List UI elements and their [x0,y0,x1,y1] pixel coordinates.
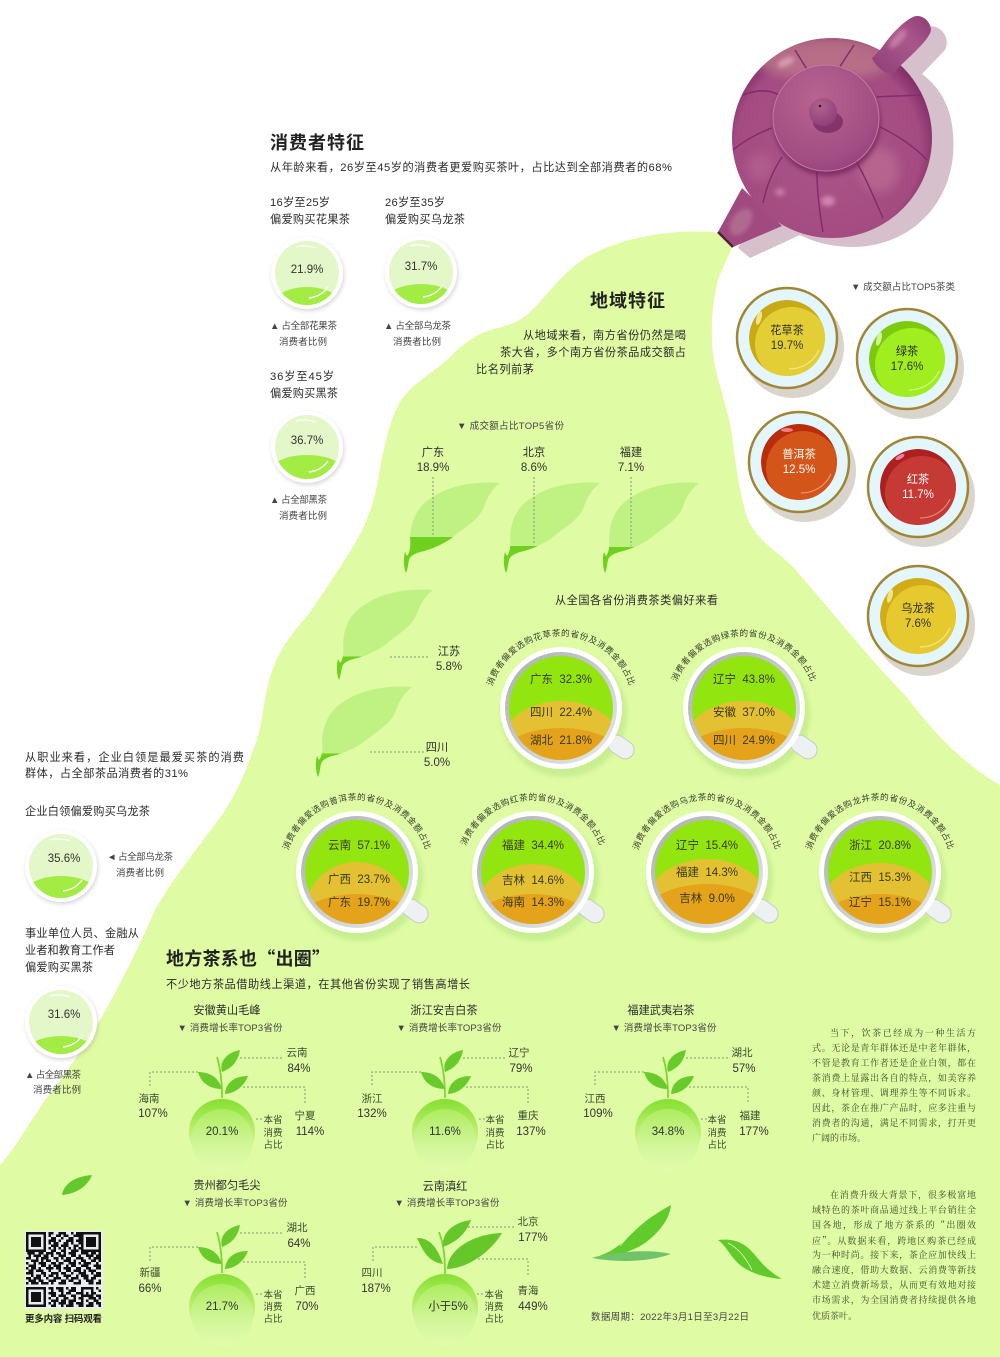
label: top5 provinces: ▼ 成交额占比TOP5省份 [457,420,564,432]
sprout: Duyun Maojian: 66% [138,1283,162,1295]
sprout: Wuyi Rock Tea: 江西 [584,1093,606,1105]
plate: black tea [868,437,975,547]
text: data period: 数据周期：2022年3月1日至3月22日 [591,1311,749,1323]
section: local tea [138,945,769,1346]
occupation intro text: 从职业来看，企业白领是最爱买茶的消费 [25,750,244,764]
sprout: Duyun Maojian: 占比 [263,1313,283,1325]
cup: green tea provinces: 四川 24.9% [713,734,775,747]
gauge 21.9%: 21.9% [291,264,323,276]
white collar label: 企业白领偏爱购买乌龙茶 [25,804,150,818]
sprout: Anji White Tea: 辽宁 [508,1046,530,1059]
cup: green tea provinces: 安徽 37.0% [713,705,775,719]
sprout: Duyun Maojian: 湖北 [286,1222,308,1234]
sprout: Dianhong: 187% [361,1283,391,1295]
section: consumer features: 偏爱购买乌龙茶 [385,212,465,226]
sprout: Huangshan Maofeng: 占比 [263,1139,283,1151]
cup: black tea provinces: 消费者偏爱选购红茶的省份及消费金额占比 [460,792,606,846]
gauge 21.9% [271,237,343,319]
icon: large leaves [592,1205,782,1279]
text block: commentary two [812,1188,976,1322]
age label 36-45: 36岁至45岁 [270,369,334,383]
section: regional features [316,287,718,777]
text block: commentary two: 术建立消费新场景，从而更有效地对接 [812,1278,976,1291]
sprout: Dianhong: 本省 [484,1289,504,1301]
heading: consumer features: 消费者特征 [270,129,364,155]
sprout: Wuyi Rock Tea: 湖北 [732,1047,753,1059]
section: consumer features: 消费者比例 [393,336,441,348]
sprout: Wuyi Rock Tea: 34.8% [652,1126,684,1138]
sprout: Anji White Tea: 浙江安吉白茶 [410,1003,478,1017]
cup: oolong provinces: 辽宁 15.4% [676,838,738,852]
note: oolong consumers: ▲ 占全部乌龙茶 [384,320,451,332]
province leaf: Guangdong: 18.9% [417,462,449,474]
sprout: Anji White Tea: 重庆 [518,1109,539,1122]
text block: commentary two: 域特色的茶叶商品通过线上平台销往全 [812,1203,976,1216]
plate: black tea: 11.7% [902,489,934,501]
province leaf: Sichuan: 四川 [426,742,448,754]
sprout: Duyun Maojian: 21.7% [206,1301,238,1313]
sprout: Wuyi Rock Tea: 本省 [707,1114,727,1126]
sprout: Dianhong: 小于5% [428,1300,468,1313]
cup: longjing provinces: 浙江 20.8% [849,839,911,852]
sprout: Dianhong: 北京 [518,1215,538,1228]
age label 26-35: 26岁至35岁 [385,195,445,209]
section: consumer features: 消费者比例 [279,510,327,522]
teapot shadow [738,26,953,258]
province leaf: Jiangsu: 5.8% [436,661,462,673]
province leaf: Beijing: 8.6% [521,462,547,474]
sprout: Duyun Maojian: 70% [295,1301,319,1313]
sprout: Duyun Maojian: 贵州都匀毛尖 [193,1179,261,1192]
sprout: Huangshan Maofeng: 安徽黄山毛峰 [193,1003,261,1017]
section: regional features: 比名列前茅 [476,362,534,376]
gauge 35.6%: 35.6% [48,853,80,865]
section: occupation: 偏爱购买黑茶 [25,960,93,974]
section: occupation [21,750,244,1096]
sprout: Duyun Maojian [138,1179,319,1346]
cup: flower tea provinces: 消费者偏爱选购花草茶的省份及消费金额占比 [486,628,636,686]
sprout: Huangshan Maofeng: 消费 [263,1127,283,1139]
qr code [25,1231,103,1325]
text block: commentary one: 茶消费上显露出各自的特点，如美容养 [812,1071,976,1084]
section: occupation: 消费者比例 [33,1084,81,1096]
cup: black tea provinces: 吉林 14.6% [502,873,564,887]
text block: commentary two: 融合速度，借助大数据、云消费等新技 [812,1263,976,1276]
body petals [733,45,927,232]
sprout: Anji White Tea: 浙江 [362,1093,383,1105]
sprout: Dianhong: 449% [518,1301,548,1313]
sprout: Huangshan Maofeng [138,1003,324,1171]
gauge 31.6% [24,990,100,1062]
text block: commentary one: 消费者的沟通，满足不同需求，打开更 [812,1116,976,1129]
section: consumer features: 偏爱购买花果茶 [270,212,350,226]
province leaf: Fujian: 7.1% [618,462,644,474]
sprout: Duyun Maojian: 新疆 [140,1266,161,1279]
cup: pu'er provinces: 消费者偏爱选购普洱茶的省份及消费金额占比 [282,792,432,850]
province leaf: Fujian [603,445,699,573]
cup: pu'er provinces: 广东 19.7% [328,896,390,909]
sprout: Dianhong: 占比 [484,1313,504,1325]
plate: oolong tea: 乌龙茶 [901,601,935,615]
province leaf: Guangdong: 广东 [422,446,444,459]
heading: regional features: 地域特征 [590,287,665,313]
sprout: Wuyi Rock Tea: 109% [583,1108,613,1120]
text block: commentary two: 优质茶叶。 [812,1309,857,1322]
cup: flower tea provinces [486,628,636,778]
text block: commentary one [812,1026,976,1144]
sprout: Wuyi Rock Tea: ▼ 消费增长率TOP3省份 [612,1022,717,1034]
cup: pu'er provinces: 广西 23.7% [328,873,390,886]
text block: commentary one: 式。无论是青年群体还是中老年群体， [812,1041,976,1054]
panel: top5 tea plates [737,281,975,676]
province leaf: Fujian: 福建 [620,445,642,459]
lid [773,68,881,176]
icon: small leaf [62,1175,92,1195]
label: national preference: 从全国各省份消费茶类偏好来看 [555,593,718,607]
text block: commentary two: 市场需求，为全国消费者持续提供各地 [812,1293,976,1306]
handle [872,16,931,74]
section: occupation: 群体，占全部茶品消费者的31% [25,766,188,780]
plate: oolong tea: 7.6% [905,618,931,630]
local tea intro: 不少地方茶品借助线上渠道，在其他省份实现了销售高增长 [166,977,470,991]
sprout: Huangshan Maofeng: 114% [296,1126,324,1138]
sprout: Huangshan Maofeng: 宁夏 [294,1109,316,1122]
sprout: Huangshan Maofeng: 20.1% [206,1126,238,1138]
province leaf: Sichuan [316,687,450,777]
text block: commentary two: 为一种时尚。接下来，茶企应加快线上 [812,1248,976,1261]
section: occupation: 消费者比例 [116,867,164,879]
cup: pu'er provinces [282,792,432,942]
text block: commentary one: 广阔的市场。 [812,1131,866,1144]
sprout: Huangshan Maofeng: 海南 [138,1092,160,1105]
cup: oolong provinces: 吉林 9.0% [679,891,735,905]
sprout: Huangshan Maofeng: ▼ 消费增长率TOP3省份 [178,1022,283,1034]
sprout: Anji White Tea: 占比 [485,1139,505,1151]
public sector label: 事业单位人员、金融从 [25,926,139,940]
note: oolong share: ◄ 占全部乌龙茶 [107,851,173,863]
plate: pu'er tea [749,412,856,522]
sprout: Anji White Tea [357,1003,546,1171]
sprout: Duyun Maojian: 消费 [263,1301,283,1313]
plate: black tea: 红茶 [907,473,929,486]
plate: flower tea [737,288,844,398]
qr caption: 更多内容 扫码观看 [25,1313,102,1325]
sprout: Anji White Tea: 消费 [485,1127,505,1139]
age intro text: 从年龄来看，26岁至45岁的消费者更爱购买茶叶，占比达到全部消费者的68% [270,160,672,174]
plate: green tea [857,309,964,419]
sprout: Anji White Tea: 132% [357,1108,387,1120]
note: black tea consumers: ▲ 占全部黑茶 [270,494,327,506]
sprout: Wuyi Rock Tea: 福建 [740,1109,761,1122]
sprout: Wuyi Rock Tea: 177% [739,1126,769,1138]
province leaf: Beijing [504,445,600,573]
sprout: Wuyi Rock Tea: 占比 [707,1139,727,1151]
sprout: Duyun Maojian: 广西 [294,1285,316,1297]
cup: longjing provinces: 江西 15.3% [849,871,911,884]
cup: flower tea provinces: 湖北 21.8% [530,733,592,747]
sprout: Dianhong: ▼ 消费增长率TOP3省份 [394,1197,500,1209]
sprout: Wuyi Rock Tea: 消费 [707,1127,727,1139]
sprout: Anji White Tea: 本省 [485,1114,505,1126]
cup: longjing provinces [804,792,954,942]
sprout: Dianhong [361,1179,548,1346]
cup: longjing provinces: 辽宁 15.1% [849,895,911,909]
teapot body [732,38,932,238]
sprout: Huangshan Maofeng: 云南 [286,1046,308,1059]
text block: commentary two: 应”。从数据来看，跨地区购茶已经成 [812,1234,976,1247]
section: consumer features [265,129,672,522]
gauge 36.7%: 36.7% [291,435,323,447]
province leaf: Jiangsu [337,590,462,680]
text block: commentary one: 因此，茶企在推广产品时，应多注重与 [812,1101,976,1114]
cup: green tea provinces [670,628,818,778]
sprout: Huangshan Maofeng: 107% [138,1108,168,1120]
cup: black tea provinces: 海南 14.3% [502,895,564,909]
spout [718,188,782,247]
gauge 36.7% [270,415,346,486]
plate: flower tea: 19.7% [771,340,803,352]
cup: oolong provinces [632,792,782,942]
sprout: Wuyi Rock Tea: 福建武夷岩茶 [627,1003,695,1017]
sprout: Wuyi Rock Tea: 57% [732,1063,756,1075]
text block: commentary two: 国各地，形成了地方茶系的“出圈效 [812,1218,976,1231]
gauge 31.7% [384,240,460,312]
sprout: Duyun Maojian: 本省 [263,1289,283,1301]
cup: black tea provinces [460,792,606,942]
plate: green tea: 17.6% [891,361,923,373]
cup: flower tea provinces: 广东 32.3% [530,673,592,686]
cup: oolong provinces: 消费者偏爱选购乌龙茶的省份及消费金额占比 [632,792,782,850]
sprout: Anji White Tea: 11.6% [429,1126,461,1138]
sprout: Dianhong: 云南滇红 [423,1179,467,1193]
age label 16-25: 16岁至25岁 [270,195,330,209]
sprout: Huangshan Maofeng: 本省 [263,1114,283,1126]
text block: commentary one: 当下，饮茶已经成为一种生活方 [830,1026,976,1039]
province leaf: Beijing: 北京 [523,445,545,459]
section: occupation: 业者和教育工作者 [25,943,115,957]
gauge 31.7%: 31.7% [405,261,437,273]
sprout: Anji White Tea: 79% [509,1063,533,1075]
cup: flower tea provinces: 四川 22.4% [530,706,592,719]
sprout: Anji White Tea: ▼ 消费增长率TOP3省份 [396,1022,502,1034]
plate: pu'er tea: 普洱茶 [782,447,816,461]
regional intro text: 从地域来看，南方省份仍然是喝 [523,328,686,342]
teapot [718,16,953,258]
sprout: Huangshan Maofeng: 84% [287,1063,311,1075]
section: consumer features: 消费者比例 [279,336,327,348]
sprout: Dianhong: 177% [518,1232,548,1244]
section: consumer features: 偏爱购买黑茶 [270,386,338,400]
note: flower tea consumers: ▲ 占全部花果茶 [270,320,337,332]
section: regional features: 茶大省，多个南方省份茶品成交额占 [500,345,686,359]
gauge 31.6%: 31.6% [48,1009,80,1021]
sprout: Anji White Tea: 137% [516,1126,546,1138]
note: black tea share: ▲ 占全部黑茶 [25,1069,81,1081]
gauge 35.6% [24,834,100,906]
sprout: Dianhong: 四川 [362,1267,382,1279]
text block: commentary one: 不管是教育工作者还是企业白领，都在 [812,1056,976,1069]
heading: local tea: 地方茶系也“出圈” [166,945,330,971]
text block: commentary two: 在消费升级大背景下，很多极富地 [830,1188,976,1201]
sprout: Duyun Maojian: ▼ 消费增长率TOP3省份 [182,1197,288,1209]
sprout: Duyun Maojian: 64% [287,1238,311,1250]
plate: flower tea: 花草茶 [770,324,804,337]
province leaf: Jiangsu: 江苏 [438,645,460,658]
plate: oolong tea [868,566,975,676]
plate: green tea: 绿茶 [896,344,918,358]
cup: black tea provinces: 福建 34.4% [502,838,564,852]
cup: oolong provinces: 福建 14.3% [676,865,738,879]
cup: green tea provinces: 消费者偏爱选购绿茶的省份及消费金额占比 [670,628,816,682]
sprout: Dianhong: 消费 [484,1301,504,1313]
cup: pu'er provinces: 云南 57.1% [328,838,390,852]
cup: longjing provinces: 消费者偏爱选购龙井茶的省份及消费金额占比 [804,792,954,850]
province leaf: Sichuan: 5.0% [424,757,450,769]
sprout: Dianhong: 青海 [518,1284,539,1297]
label: top5 tea types: ▼ 成交额占比TOP5茶类 [851,281,955,293]
plate: pu'er tea: 12.5% [783,464,815,476]
cup: green tea provinces: 辽宁 43.8% [713,672,775,686]
knob [813,111,843,133]
province leaf: Guangdong [404,446,500,573]
text block: commentary one: 颜、身材管理、调理养生等不同诉求。 [812,1086,976,1099]
sprout: Wuyi Rock Tea [583,1003,769,1171]
